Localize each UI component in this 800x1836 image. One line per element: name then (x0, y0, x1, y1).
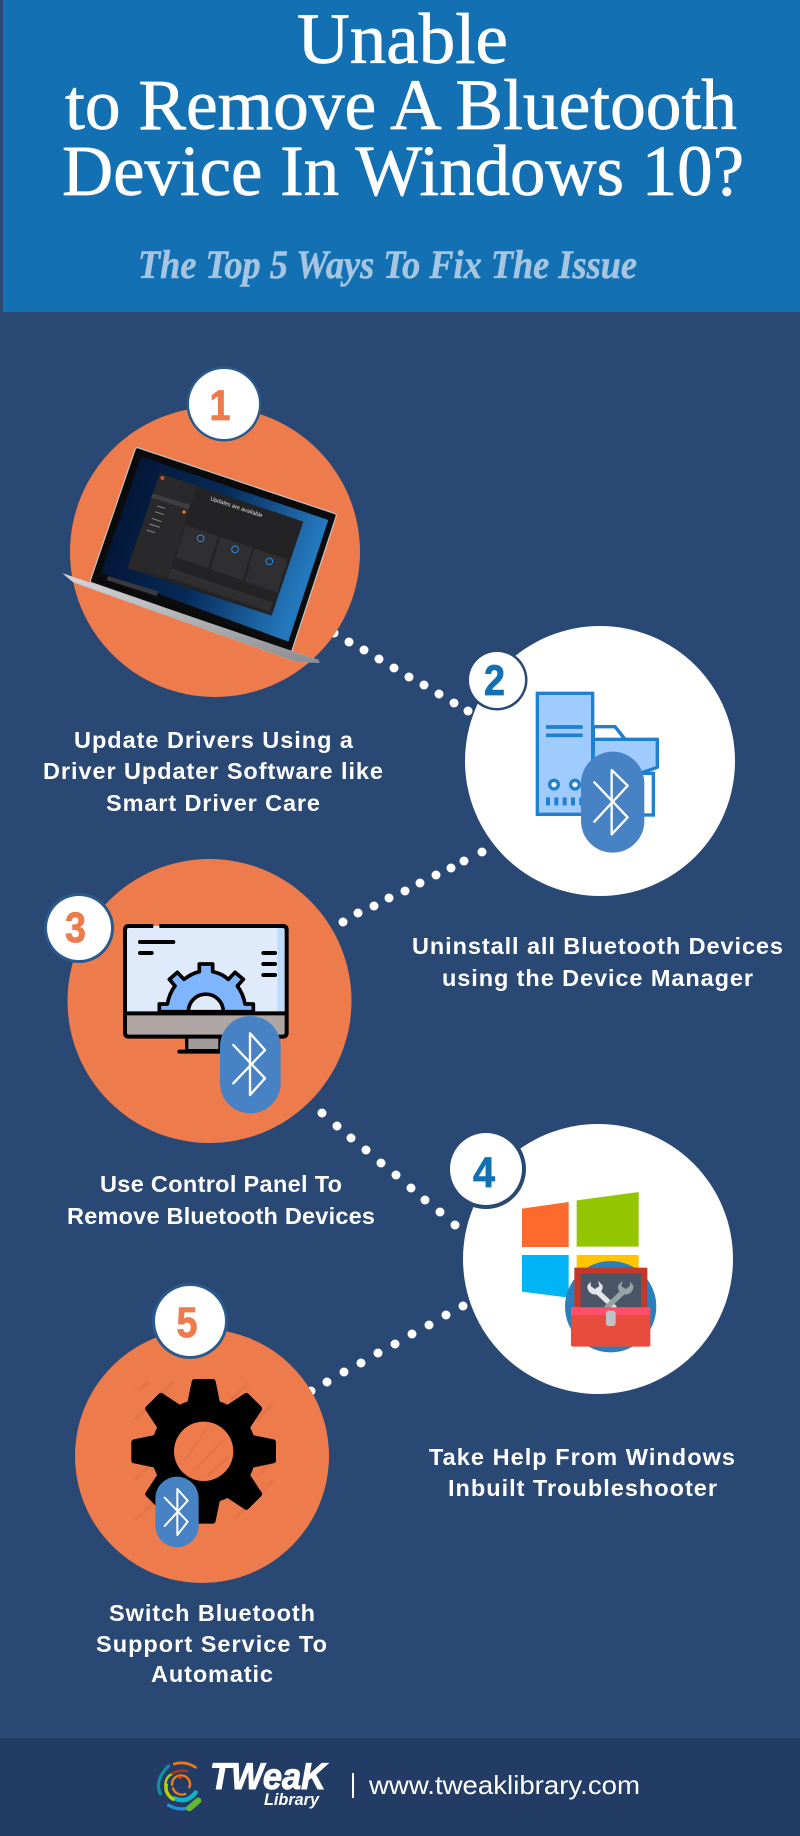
header banner (3, 0, 800, 312)
title: Unable (297, 0, 508, 79)
caption 5 (96, 1600, 327, 1687)
icon: black gear with bluetooth (134, 1382, 273, 1547)
dotted connector: step 4 to step 5 (306, 1302, 468, 1396)
caption 3: Remove Bluetooth Devices (67, 1203, 375, 1229)
number badge 1: 1 (210, 382, 230, 430)
caption 4 (429, 1444, 735, 1501)
number badge 3 (44, 893, 114, 963)
caption 1: Driver Updater Software like (43, 758, 383, 784)
dotted connector: step 2 to step 3 (338, 848, 486, 926)
panel: step 5 bluetooth support service (75, 1283, 329, 1687)
number badge 2: 2 (484, 657, 505, 705)
icon: laptop with driver updater window: Updates are available (209, 496, 263, 519)
caption 3: Use Control Panel To (100, 1171, 342, 1197)
icon: tweak library logo rings (158, 1763, 198, 1809)
number badge 4: 4 (473, 1149, 495, 1197)
footer bar (0, 1738, 800, 1836)
panel: step 1 update drivers (43, 366, 383, 816)
subtitle: The Top 5 Ways To Fix The Issue (138, 242, 637, 287)
caption 1: Update Drivers Using a (74, 727, 354, 753)
number badge 3: 3 (65, 904, 86, 952)
logo wordmark: TWeaK (210, 1756, 328, 1797)
icon: monitor with gear and bluetooth (125, 926, 287, 1113)
caption 1 (43, 727, 383, 816)
panel: step 4 windows troubleshooter (429, 1124, 735, 1501)
icon: windows logo with toolbox (522, 1192, 656, 1352)
panel: step 3 control panel (44, 859, 375, 1229)
caption 4: Inbuilt Troubleshooter (448, 1475, 717, 1501)
panel: step 2 uninstall via device manager (412, 626, 783, 991)
caption 1: Smart Driver Care (106, 790, 320, 816)
caption 5: Automatic (151, 1661, 273, 1687)
number badge 5 (152, 1283, 228, 1359)
title: Device In Windows 10? (62, 131, 744, 211)
caption 3 (67, 1171, 375, 1229)
caption 5: Support Service To (96, 1631, 327, 1657)
icon: laptop with driver updater window (63, 450, 334, 663)
title: to Remove A Bluetooth (65, 65, 737, 145)
caption 2: Uninstall all Bluetooth Devices (412, 933, 783, 959)
title (62, 0, 744, 211)
dotted connector: step 1 to step 2 (330, 628, 472, 716)
logo wordmark: Library (264, 1790, 320, 1809)
dotted connector: step 3 to step 4 (318, 1108, 460, 1230)
caption 2: using the Device Manager (442, 965, 753, 991)
caption 4: Take Help From Windows (429, 1444, 735, 1470)
number badge 1 (186, 366, 262, 442)
number badge 2 (466, 650, 528, 710)
icon: computer tower and folder with bluetooth (537, 693, 657, 853)
caption 5: Switch Bluetooth (109, 1600, 315, 1626)
caption 2 (412, 933, 783, 991)
number badge 5: 5 (176, 1299, 198, 1347)
website url: www.tweaklibrary.com (368, 1770, 640, 1800)
number badge 4 (446, 1129, 526, 1209)
